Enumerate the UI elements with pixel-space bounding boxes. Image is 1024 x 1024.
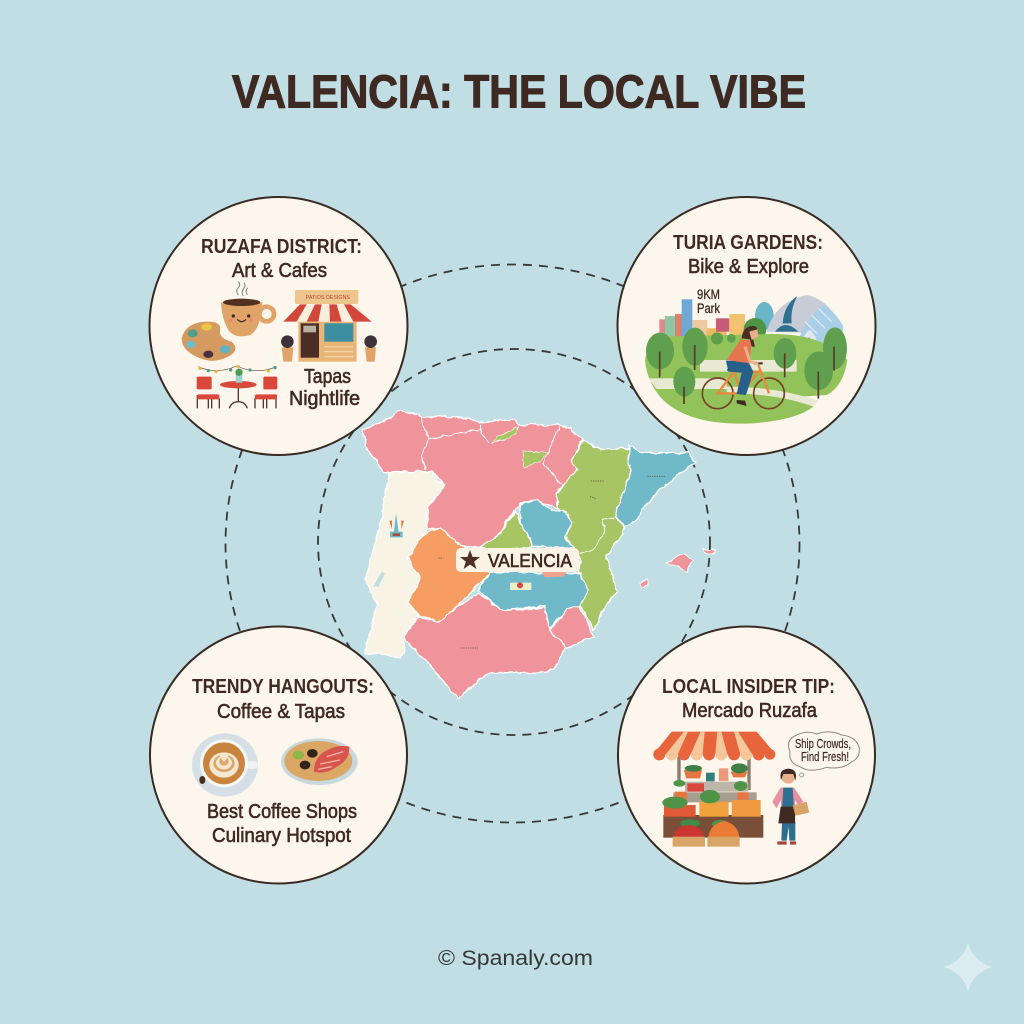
island: Menorca — [702, 548, 715, 555]
icon: table and chairs — [197, 369, 277, 408]
awning — [653, 732, 776, 760]
icon: shop front — [281, 290, 377, 362]
region: Navarra green — [523, 450, 548, 467]
icon: star — [460, 550, 480, 569]
region: Murcia — [550, 607, 593, 648]
subheading: Coffee & Tapas — [217, 700, 345, 723]
icon: string lights — [198, 365, 277, 373]
title: VALENCIA: THE LOCAL VIBE — [232, 66, 806, 118]
illustration: park and cyclist — [645, 295, 847, 424]
icon: tapas plate — [281, 738, 358, 785]
caption: Best Coffee Shops — [207, 800, 357, 823]
tiny marks — [438, 476, 666, 648]
Arts and Sciences buildings — [755, 295, 843, 377]
label: Valencia — [456, 548, 579, 572]
tiny place marker — [510, 582, 531, 590]
region: Extremadura — [408, 527, 490, 622]
region: Aragon and Valencia — [557, 442, 630, 630]
region: central blue — [520, 500, 573, 548]
river — [373, 572, 385, 587]
region: north Spain — [363, 410, 583, 547]
region: Andalusia — [403, 593, 567, 698]
cyclist on bicycle — [702, 326, 784, 409]
label: Park: Park — [697, 301, 720, 316]
bubble text: Find Fresh! — [801, 749, 849, 764]
panel: Ruzafa District — [150, 197, 408, 455]
icon: coffee cup — [221, 282, 274, 336]
buildings — [659, 299, 745, 343]
caption: Tapas — [304, 365, 351, 388]
bubble text: Ship Crowds, — [795, 736, 851, 751]
icon: paint palette — [182, 322, 235, 361]
island: Ibiza — [640, 578, 648, 588]
region: small green — [480, 510, 532, 550]
icon: sparkle — [944, 943, 992, 991]
heading: LOCAL INSIDER TIP: — [662, 675, 835, 698]
map of Spain and Portugal — [363, 410, 715, 698]
thought bubble — [788, 732, 859, 777]
lawn — [645, 318, 847, 424]
map regions — [363, 410, 715, 698]
shelves — [673, 780, 757, 802]
panel: Local Insider Tip — [618, 626, 875, 884]
subheading: Mercado Ruzafa — [682, 699, 818, 722]
region borders — [420, 417, 617, 553]
region: Basque green — [490, 427, 518, 443]
caption: Nightlife — [289, 387, 360, 410]
label: 9KM: 9KM — [697, 287, 720, 302]
footer: © Spanaly.com — [438, 947, 593, 970]
icon: shop front: PATIOS DESIGNS — [306, 295, 350, 301]
stall posts — [679, 757, 749, 790]
icon: monument — [389, 513, 404, 537]
heading: RUZAFA DISTRICT: — [201, 235, 362, 258]
region: salmon patch — [542, 572, 567, 577]
caption: Culinary Hotspot — [212, 824, 351, 847]
icon: latte — [192, 733, 258, 797]
dashed ring: outer — [226, 264, 800, 822]
region: Portugal — [365, 472, 445, 658]
trees — [646, 327, 847, 404]
crates — [662, 790, 763, 847]
island: Mallorca — [667, 553, 693, 572]
illustrations: cafe scene — [182, 282, 377, 408]
region: Castilla-La Mancha — [478, 572, 588, 628]
subheading: Art & Cafes — [232, 259, 327, 282]
label text: VALENCIA — [488, 551, 572, 571]
heading: TRENDY HANGOUTS: — [192, 675, 374, 698]
illustrations: coffee and tapas — [192, 733, 358, 797]
heading: TURIA GARDENS: — [673, 231, 823, 254]
panel: Turia Gardens — [618, 197, 876, 455]
panel: Trendy Hangouts — [150, 626, 407, 884]
dashed ring: inner — [318, 349, 710, 735]
top shelf produce — [684, 763, 748, 781]
region: Catalonia — [615, 443, 695, 527]
illustration: market stall and vendor — [653, 732, 859, 847]
vendor — [772, 769, 809, 845]
subheading: Bike & Explore — [688, 255, 809, 278]
